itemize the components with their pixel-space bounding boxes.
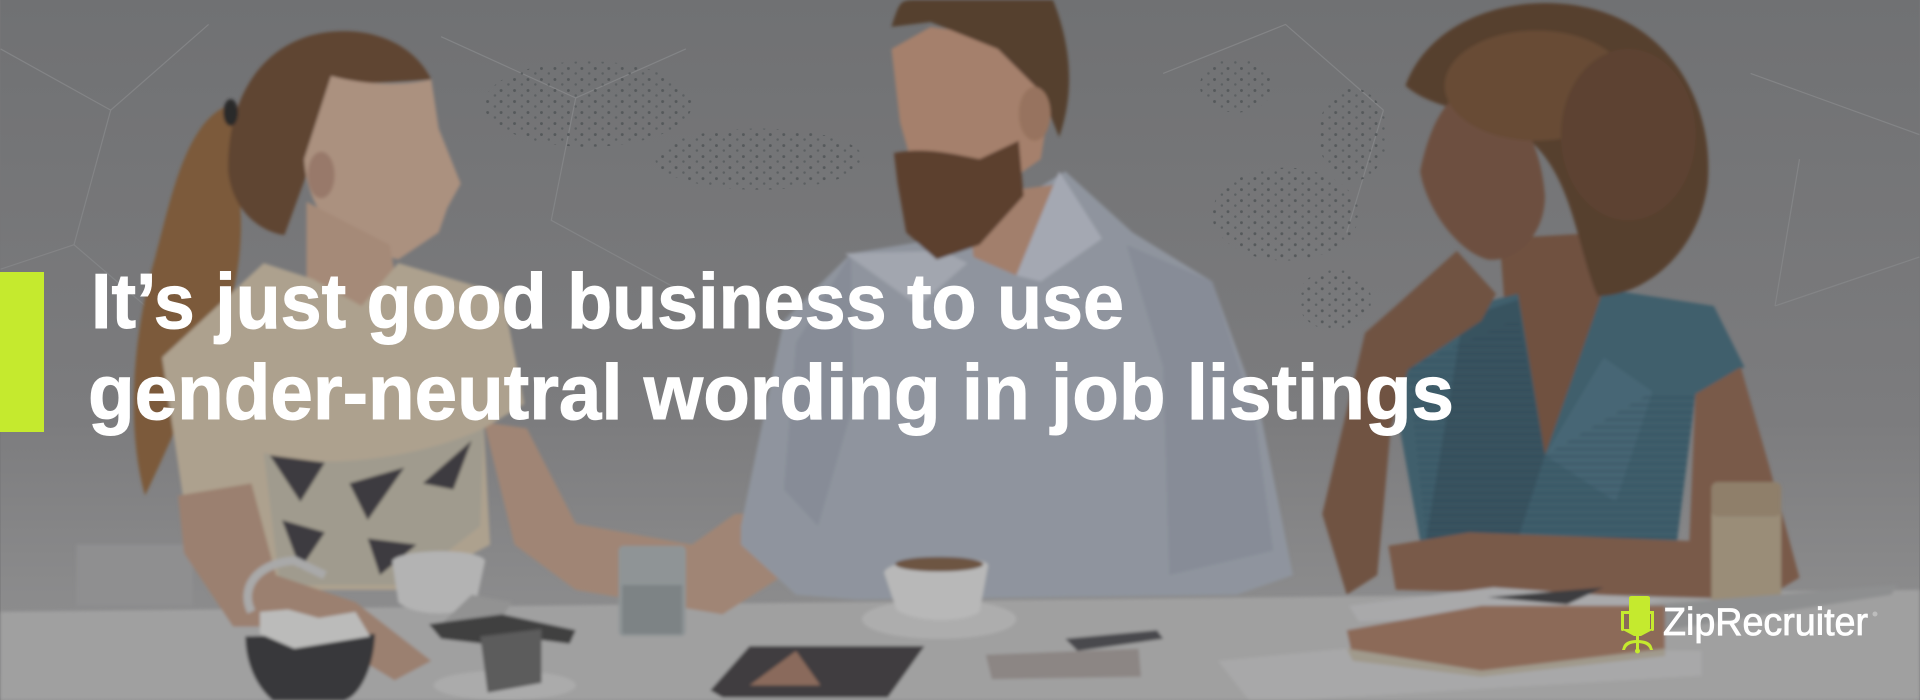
registered mark [1872, 612, 1878, 616]
table objects [245, 482, 1897, 700]
headline: It’s just good business to use [91, 257, 1124, 345]
man centre [741, 0, 1293, 600]
accent bar [0, 272, 44, 432]
woman right [1322, 3, 1800, 600]
wordmark: ZipRecruiter [1663, 601, 1868, 644]
table [1, 590, 1919, 700]
headline: gender-neutral wording in job listings [88, 348, 1454, 436]
woman left [134, 31, 814, 680]
icon: lime office chair [1621, 596, 1654, 654]
